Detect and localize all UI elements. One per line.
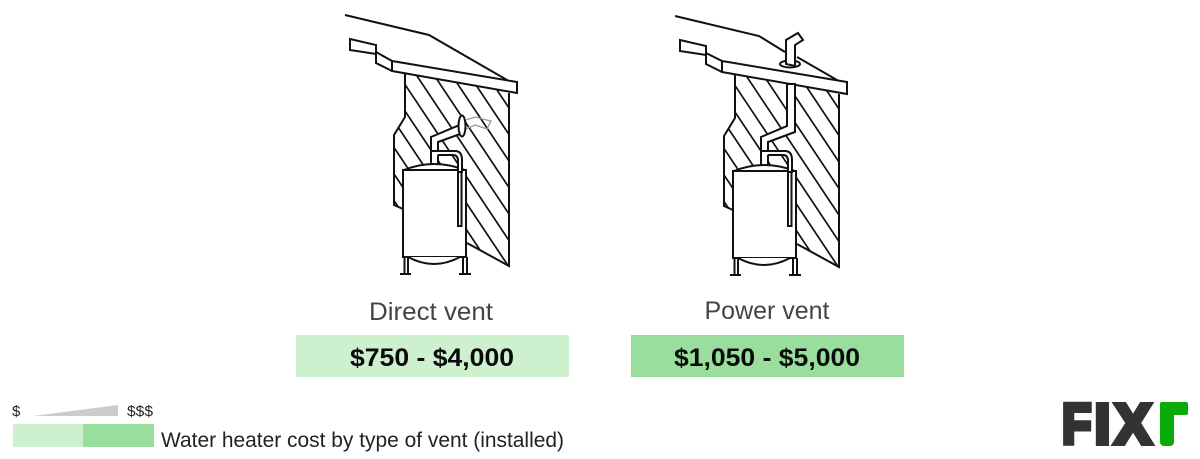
legend low symbol: $ <box>12 403 21 420</box>
legend swatch low <box>13 424 83 447</box>
hot pipe <box>431 151 462 172</box>
price bar: power vent <box>631 335 904 377</box>
illustration: direct vent water heater <box>344 14 518 275</box>
illustration: power vent water heater <box>674 15 848 276</box>
smoke <box>466 117 491 129</box>
legend caption: Water heater cost by type of vent (installed) <box>161 429 564 452</box>
vent pipe <box>761 84 795 166</box>
price bar: power vent: $1,050 - $5,000 <box>674 344 860 372</box>
legend high symbol: $$$ <box>127 403 154 420</box>
label: direct vent: Direct vent <box>369 298 493 326</box>
logo: Fixr: I <box>1094 392 1110 456</box>
price bar: direct vent <box>296 335 569 377</box>
legend swatch high <box>83 424 154 447</box>
logo: Fixr <box>1062 392 1188 456</box>
tank <box>404 164 465 170</box>
price bar: direct vent: $750 - $4,000 <box>350 344 514 372</box>
legend wedge <box>33 405 118 416</box>
tank <box>730 151 801 275</box>
flue pipe <box>431 124 463 166</box>
logo: Fixr: X <box>1114 392 1152 456</box>
label: power vent: Power vent <box>704 297 830 325</box>
legend <box>12 403 564 452</box>
roof vent <box>786 33 803 66</box>
logo: Fixr: F <box>1062 392 1091 456</box>
logo: Fixr: r <box>1162 425 1170 447</box>
